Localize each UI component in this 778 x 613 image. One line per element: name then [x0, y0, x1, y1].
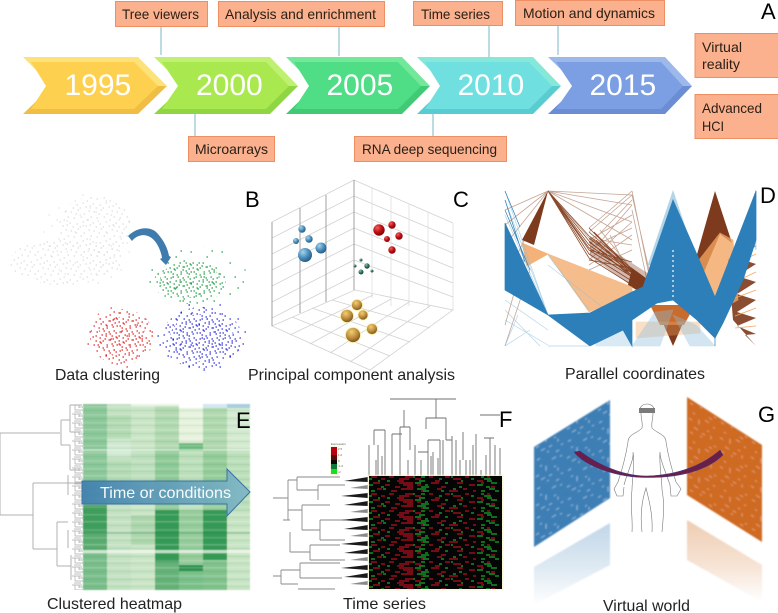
column dendrogram	[369, 399, 500, 476]
panel letter D: D	[760, 183, 776, 208]
orange data wall	[687, 397, 762, 542]
milestone: Motion and dynamics	[516, 0, 664, 26]
panel letter F: F	[499, 407, 512, 432]
panel letter E: E	[236, 408, 251, 433]
heatmap cells	[83, 404, 250, 590]
chevron 2010	[417, 57, 561, 114]
milestone: Microarrays	[188, 136, 274, 162]
blue line mass	[505, 191, 756, 346]
caption: Time series: Time series	[343, 596, 426, 613]
milestone: RNA deep sequencing: RNA deep sequencing	[362, 141, 497, 157]
human figure with headset	[614, 404, 681, 532]
chevron 1995	[23, 57, 167, 114]
caption: Principal component analysis: Principal component analysis	[248, 367, 455, 384]
caption: Clustered heatmap: Clustered heatmap	[47, 596, 182, 613]
milestone: Advanced HCI: Advanced	[702, 100, 762, 116]
expression heatmap	[368, 474, 504, 590]
arrow: Time or conditions	[82, 469, 250, 516]
red cluster	[86, 306, 158, 368]
milestone: Tree viewers	[116, 2, 208, 26]
color legend: -1.0	[338, 464, 344, 468]
light blue fringe lines	[505, 190, 756, 346]
panel F: time series	[273, 399, 512, 613]
milestone: Analysis and enrichment	[218, 2, 384, 26]
orange lines	[522, 233, 756, 338]
arc arrow across walls	[574, 450, 723, 478]
chevron 2005: 2005	[326, 69, 393, 102]
chevron 2000	[154, 57, 298, 114]
chevron 2015: 2015	[590, 69, 656, 102]
milestone: Microarrays: Microarrays	[195, 141, 268, 157]
milestone: Virtual reality	[695, 34, 778, 78]
panel E: clustered heatmap	[0, 404, 251, 613]
color legend: Expression	[331, 442, 346, 446]
panel B: data clustering	[10, 187, 260, 384]
color legend	[330, 442, 346, 476]
milestone: Advanced HCI	[695, 94, 778, 138]
blue data wall	[534, 400, 610, 547]
chevron 2015	[548, 57, 692, 114]
unclustered gray points	[10, 194, 135, 286]
gold spheres	[340, 300, 378, 342]
axis dashes	[672, 250, 674, 300]
panel letter B: B	[245, 187, 260, 212]
row dendrogram	[0, 404, 83, 590]
connector lines	[161, 25, 558, 136]
tan and brown lines	[505, 191, 652, 346]
3D grid	[272, 180, 453, 370]
color legend: 2.5	[338, 447, 343, 451]
chevron 2010: 2010	[458, 69, 524, 102]
caption: Data clustering: Data clustering	[55, 367, 160, 384]
milestone: Virtual reality: Virtual	[702, 39, 742, 55]
color legend: 0	[338, 459, 340, 463]
milestone: RNA deep sequencing	[354, 136, 506, 162]
panel G: virtual world	[534, 397, 775, 613]
chevron 1995: 1995	[64, 69, 131, 102]
arrow: Time or conditions: Time or conditions	[100, 485, 231, 502]
milestone: Analysis and enrichment: Analysis and enrichment	[225, 6, 376, 22]
panel A: timeline	[23, 0, 778, 162]
brown filled wedges	[522, 191, 756, 346]
milestone: Motion and dynamics: Motion and dynamics	[523, 5, 655, 21]
curved arrow	[128, 228, 171, 265]
chevron 2000: 2000	[196, 69, 263, 102]
panel letter G: G	[758, 402, 775, 427]
green cluster	[143, 246, 247, 308]
orange wall reflection	[687, 520, 762, 602]
panel D: parallel coordinates	[505, 183, 776, 383]
green spheres	[354, 258, 374, 274]
milestone: Time series: Time series	[421, 6, 490, 22]
red spheres	[373, 221, 403, 254]
color legend: 1.0	[338, 453, 343, 457]
panel letter C: C	[453, 187, 469, 212]
row dendrogram	[273, 476, 368, 589]
blue spheres	[293, 225, 326, 262]
caption: Parallel coordinates: Parallel coordinates	[565, 366, 705, 383]
panel C: principal component analysis	[248, 180, 469, 384]
milestone: Time series	[414, 2, 502, 26]
blue wall reflection	[534, 523, 610, 605]
color legend: -2	[338, 470, 341, 474]
blue cluster	[156, 301, 248, 373]
milestone: Virtual reality: reality	[702, 56, 740, 72]
milestone: Tree viewers: Tree viewers	[122, 6, 199, 22]
milestone: Advanced HCI: HCI	[702, 118, 724, 134]
chevron 2005	[286, 57, 430, 114]
